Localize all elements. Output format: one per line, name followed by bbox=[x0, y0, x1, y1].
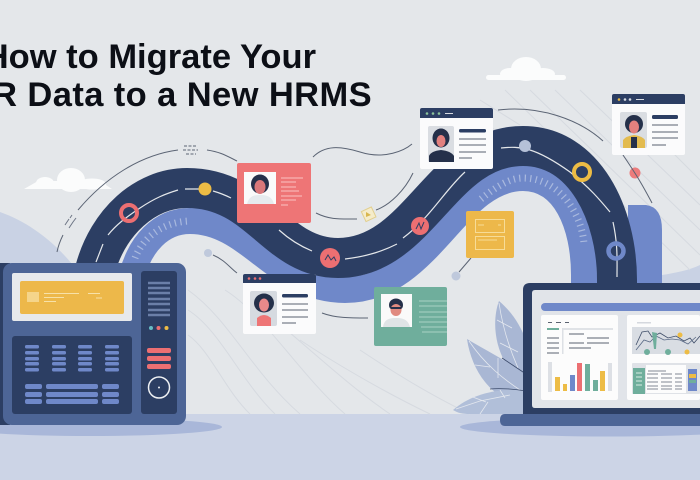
line chart bbox=[632, 327, 700, 355]
marker: pale dot bbox=[519, 140, 531, 152]
migration road bbox=[95, 146, 662, 300]
dashboard panel: right bbox=[627, 315, 700, 400]
marker: coral squiggle bbox=[320, 248, 340, 268]
marker: coral ring bbox=[121, 205, 137, 221]
data table bbox=[632, 363, 700, 394]
road: tick marks left bbox=[135, 221, 190, 258]
marker: coral N bbox=[411, 217, 429, 235]
device: keypad bbox=[12, 336, 132, 414]
device: yellow display bbox=[20, 281, 124, 314]
road: dashed centre line bbox=[96, 147, 617, 277]
laptop: base bbox=[500, 414, 700, 426]
right hill bbox=[662, 265, 700, 300]
card: bottom profile bbox=[243, 274, 316, 334]
card: coral profile bbox=[237, 163, 311, 223]
connector dot: left bbox=[204, 249, 212, 257]
floor bbox=[0, 414, 700, 480]
dashboard panel: left bbox=[541, 315, 618, 400]
road: blue band bbox=[628, 205, 662, 300]
background hill bbox=[0, 212, 72, 264]
device: body bbox=[3, 263, 186, 425]
connector dot: right bbox=[452, 272, 460, 280]
card: top middle profile bbox=[420, 108, 493, 169]
cloud: top right bbox=[486, 57, 566, 81]
leaves bbox=[453, 301, 526, 414]
card: top right profile bbox=[612, 94, 685, 155]
small yellow tag icon bbox=[361, 207, 376, 222]
marker: coral dot bbox=[630, 168, 640, 178]
cloud: left bbox=[24, 168, 112, 192]
device shadow bbox=[0, 418, 222, 436]
laptop bbox=[500, 283, 700, 426]
bar chart bbox=[548, 362, 612, 392]
road: tick marks right bbox=[481, 178, 584, 244]
laptop: screen bbox=[532, 290, 700, 408]
device: rear edge bbox=[0, 263, 10, 425]
marker: yellow ring bbox=[574, 164, 590, 180]
device: screen bbox=[12, 273, 132, 321]
marker: blue ring bbox=[608, 244, 624, 258]
laptop shadow bbox=[460, 418, 700, 436]
laptop: toolbar bbox=[541, 303, 700, 311]
card: yellow document bbox=[466, 211, 514, 258]
card: green profile bbox=[374, 287, 447, 346]
marker: yellow dot bbox=[198, 182, 212, 196]
laptop: frame bbox=[523, 283, 700, 416]
road: dark band bbox=[95, 146, 617, 300]
connector lines bbox=[57, 109, 652, 318]
server device bbox=[0, 263, 186, 425]
device: side panel bbox=[141, 271, 177, 414]
